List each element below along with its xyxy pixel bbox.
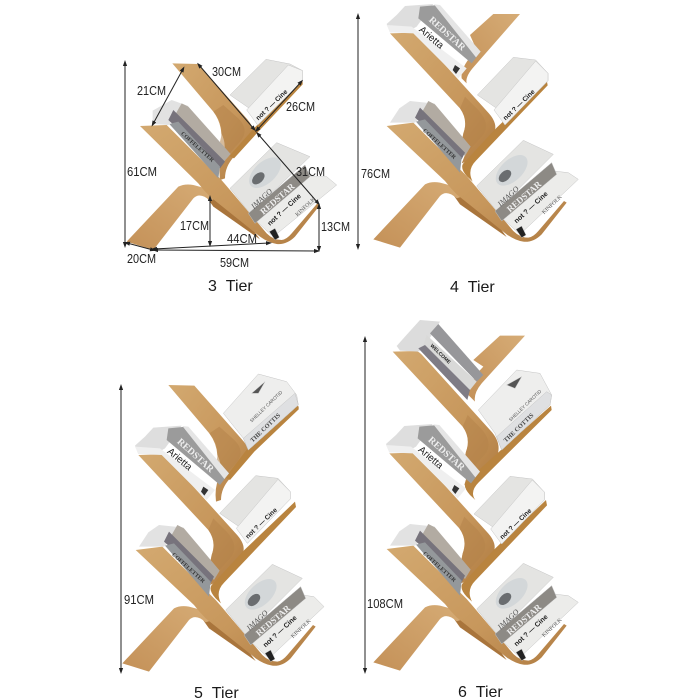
base leg (127, 184, 222, 250)
dimension labels: 31CM (296, 164, 325, 179)
arrow 17CM (209, 198, 211, 244)
right books (477, 57, 548, 125)
lower unit: REDSTAR (254, 603, 293, 638)
label 91CM: 91CM (124, 592, 154, 607)
panel: 5 tier shelf (121, 374, 324, 700)
top right books: SHELLEY CAROTID (508, 388, 543, 422)
upper right books: not ? — Cine (255, 88, 289, 122)
middle plank: REDSTAR (426, 435, 468, 474)
lower unit: not ? — Cine (262, 615, 299, 649)
lower unit (373, 524, 578, 671)
middle plank (135, 426, 296, 603)
arrow 59CM (155, 250, 317, 251)
arrow 21CM (153, 69, 183, 124)
lower unit: KINFOLK (541, 194, 564, 216)
shelf 4 tier (373, 4, 578, 248)
lower unit: COFFELETTER (421, 128, 457, 161)
dimension labels: 21CM (137, 83, 166, 98)
top right books (223, 374, 298, 450)
lower right books: REDSTAR (258, 181, 297, 217)
lower left books (153, 100, 231, 178)
panel: 4 tier shelf (358, 4, 578, 296)
lower plank (140, 125, 320, 244)
lower unit: IMAGO (495, 184, 521, 209)
lower unit: COFFELETTER (170, 552, 206, 585)
upper plank (172, 63, 253, 180)
label 76CM: 76CM (361, 166, 390, 181)
upper right books (230, 59, 303, 125)
arrow 31CM (258, 134, 318, 203)
lower unit: KINFOLK (541, 617, 564, 639)
top left books: WELCOME (429, 343, 452, 366)
lower unit (122, 525, 324, 672)
dimension labels (127, 64, 350, 270)
arrow 30CM (199, 65, 254, 129)
lower unit (373, 101, 578, 248)
top right books: THE COTTIS (249, 412, 282, 444)
lower unit: KINFOLK (290, 618, 313, 640)
height arrow 91CM (120, 387, 122, 671)
lower unit: REDSTAR (505, 602, 544, 637)
top books: REDSTAR (426, 15, 468, 54)
lower unit: REDSTAR (505, 179, 544, 214)
lower left books: COFFELETTER (179, 131, 215, 164)
middle plank: not ? — Cine (245, 507, 279, 540)
arrow 44CM (154, 243, 269, 249)
dimension labels: 44CM (227, 231, 257, 246)
top branch (468, 336, 525, 402)
top right books: SHELLEY CAROTID (249, 389, 284, 423)
middle plank: not ? — Cine (499, 507, 533, 541)
dimension labels: 17CM (180, 218, 209, 233)
arrow 13CM (318, 206, 320, 249)
height arrow 76CM (357, 16, 359, 247)
middle plank (386, 424, 547, 602)
dimension labels: 61CM (127, 164, 157, 179)
middle plank: Arietta (165, 446, 194, 473)
top plank (393, 351, 552, 500)
top right books: THE COTTIS (503, 412, 536, 444)
lower unit: IMAGO (244, 608, 270, 633)
top branch (462, 14, 520, 83)
arrow 20CM (127, 243, 153, 250)
dimension labels: 26CM (286, 99, 315, 114)
top books: Arietta (416, 25, 446, 52)
height arrow 61CM (124, 63, 126, 245)
top books (387, 4, 481, 78)
caption 4 tier: 4 Tier (450, 279, 495, 296)
shelf 6 tier (373, 320, 578, 671)
lower right books (230, 143, 337, 240)
label 108CM: 108CM (367, 596, 403, 611)
height arrow 108CM (364, 339, 366, 671)
middle plank: REDSTAR (175, 436, 217, 476)
middle plank: Arietta (416, 445, 445, 472)
arrow 26CM (257, 82, 301, 130)
panel: 3 tier shelf (125, 59, 350, 295)
right shelf (462, 80, 548, 182)
top plank (168, 385, 299, 502)
right books: not ? — Cine (502, 88, 537, 122)
lower unit: not ? — Cine (513, 191, 550, 225)
dimension labels: 13CM (321, 219, 350, 234)
lower unit: not ? — Cine (513, 614, 550, 648)
upper right shelf (229, 80, 303, 158)
shelf 3 tier (127, 59, 337, 250)
upper plank (390, 33, 495, 163)
dimension labels: 59CM (220, 255, 249, 270)
dimension labels: 20CM (127, 251, 156, 266)
plank underside (205, 193, 260, 239)
lower unit: COFFELETTER (421, 551, 457, 584)
lower right books: IMAGO (248, 187, 274, 211)
top right books (478, 370, 552, 450)
caption 3 tier: 3 Tier (208, 278, 253, 295)
lower unit: IMAGO (495, 607, 521, 632)
shelf 5 tier (122, 374, 324, 672)
top left books (397, 320, 483, 400)
lower right books: not ? — Cine (267, 193, 303, 227)
dimension labels: 30CM (212, 64, 241, 79)
panel: 6 tier shelf (365, 320, 578, 700)
lower right books: KINFOLK (295, 196, 318, 218)
